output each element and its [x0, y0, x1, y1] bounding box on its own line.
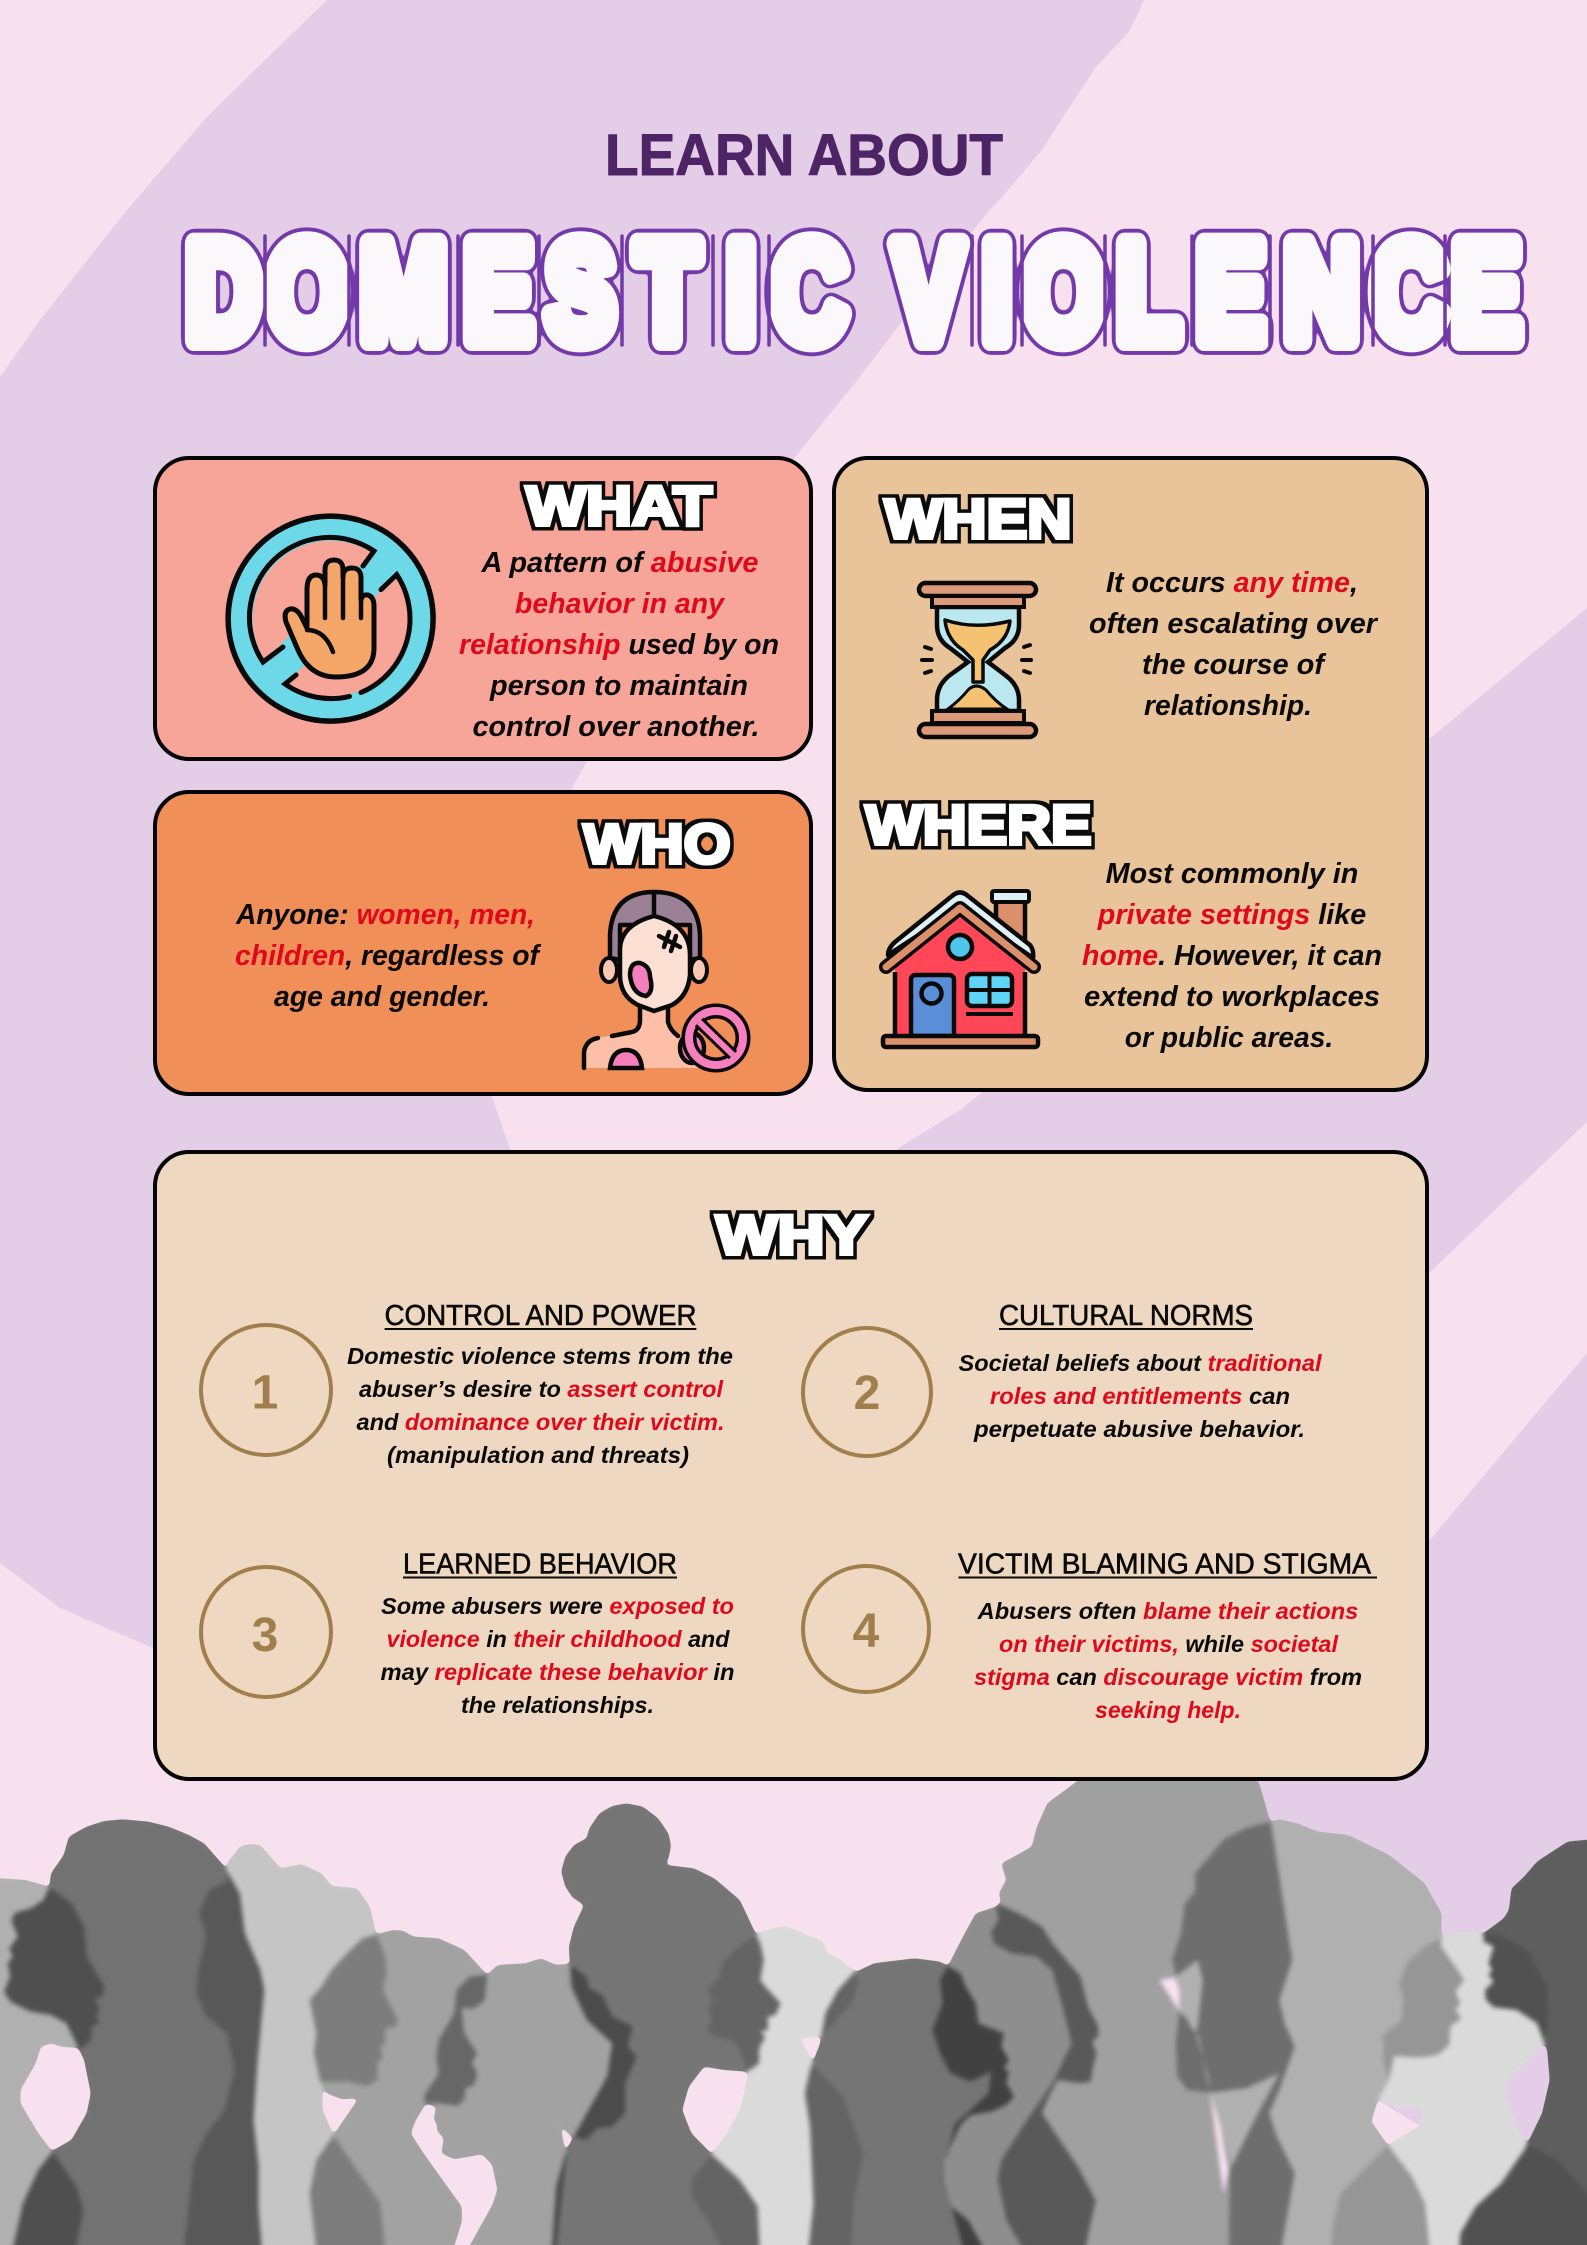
panel: what [155, 458, 811, 759]
text: when description: often escalating over [1089, 608, 1379, 640]
reason 3: may replicate these behavior in [380, 1659, 734, 1685]
reason 2: 2 [854, 1367, 880, 1420]
text: when description: It occurs any time, [1106, 567, 1358, 599]
text: where description: extend to workplaces [1084, 981, 1380, 1013]
text: who description [235, 899, 541, 1013]
panel: why [155, 1152, 1427, 1779]
heading: when: WHEN [884, 487, 1072, 550]
reason 3: Some abusers were exposed to [381, 1593, 734, 1619]
reason 4: VICTIM BLAMING AND STIGMA [958, 1548, 1372, 1580]
text: where description: private settings like [1097, 899, 1366, 931]
silhouettes of people [0, 1760, 1587, 2245]
text: what description: control over another. [472, 711, 760, 743]
heading: where: WHERE [866, 793, 1092, 856]
heading: why: WHY [716, 1203, 868, 1266]
text: who description: Anyone: women, men, [235, 899, 535, 931]
text: who description: children, regardless of [235, 940, 541, 972]
reason 4: seeking help. [1095, 1697, 1241, 1723]
text: when description: relationship. [1144, 690, 1312, 722]
reason 3 [201, 1548, 734, 1718]
text: what description: behavior in any [515, 588, 726, 620]
text: what description: A pattern of abusive [480, 547, 759, 579]
reason 1: CONTROL AND POWER [384, 1300, 696, 1332]
text: what description: relationship used by on [459, 629, 779, 661]
reason 3: 3 [252, 1609, 278, 1662]
panel: who [155, 792, 811, 1094]
panel: when and where [834, 458, 1427, 1090]
text: who description: age and gender. [274, 981, 490, 1013]
reason 4: Abusers often blame their actions [977, 1598, 1358, 1624]
title: domestic violence: DOMESTIC VIOLENCE [186, 215, 1521, 371]
text: where description [1082, 858, 1382, 1054]
reason 1: and dominance over their victim. [356, 1409, 724, 1435]
text: where description: home. However, it can [1082, 940, 1382, 972]
heading: who: WHO [584, 812, 730, 875]
reason 4: on their victims, while societal [999, 1631, 1339, 1657]
reason 4: 4 [853, 1605, 880, 1658]
reason 4 [803, 1548, 1377, 1723]
text: when description [1089, 567, 1379, 722]
text: what description [459, 547, 779, 743]
icon: house [883, 891, 1038, 1047]
reason 1: 1 [252, 1366, 278, 1420]
reason 2 [803, 1300, 1322, 1456]
reason 1: Domestic violence stems from the [347, 1343, 733, 1369]
reason 1 [201, 1300, 733, 1468]
heading: what: WHAT [526, 474, 712, 537]
reason 3: violence in their childhood and [386, 1626, 730, 1652]
reason 3: LEARNED BEHAVIOR [403, 1548, 677, 1580]
title: learn about: LEARN ABOUT [605, 123, 1003, 188]
reason 2: perpetuate abusive behavior. [973, 1416, 1305, 1442]
reason 1: abuser’s desire to assert control [359, 1376, 724, 1402]
icon: stop hand [228, 516, 433, 721]
icon: injured woman [584, 892, 743, 1068]
reason 2: Societal beliefs about traditional [958, 1350, 1322, 1376]
text: where description: Most commonly in [1106, 858, 1358, 890]
icon: hourglass [919, 583, 1036, 737]
text: when description: the course of [1142, 649, 1327, 681]
reason 1: (manipulation and threats) [387, 1442, 689, 1468]
text: what description: person to maintain [489, 670, 748, 702]
text: where description: or public areas. [1125, 1022, 1333, 1054]
reason 4: stigma can discourage victim from [974, 1664, 1362, 1690]
reason 2: roles and entitlements can [990, 1383, 1290, 1409]
reason 2: CULTURAL NORMS [999, 1300, 1253, 1332]
reason 3: the relationships. [461, 1692, 654, 1718]
